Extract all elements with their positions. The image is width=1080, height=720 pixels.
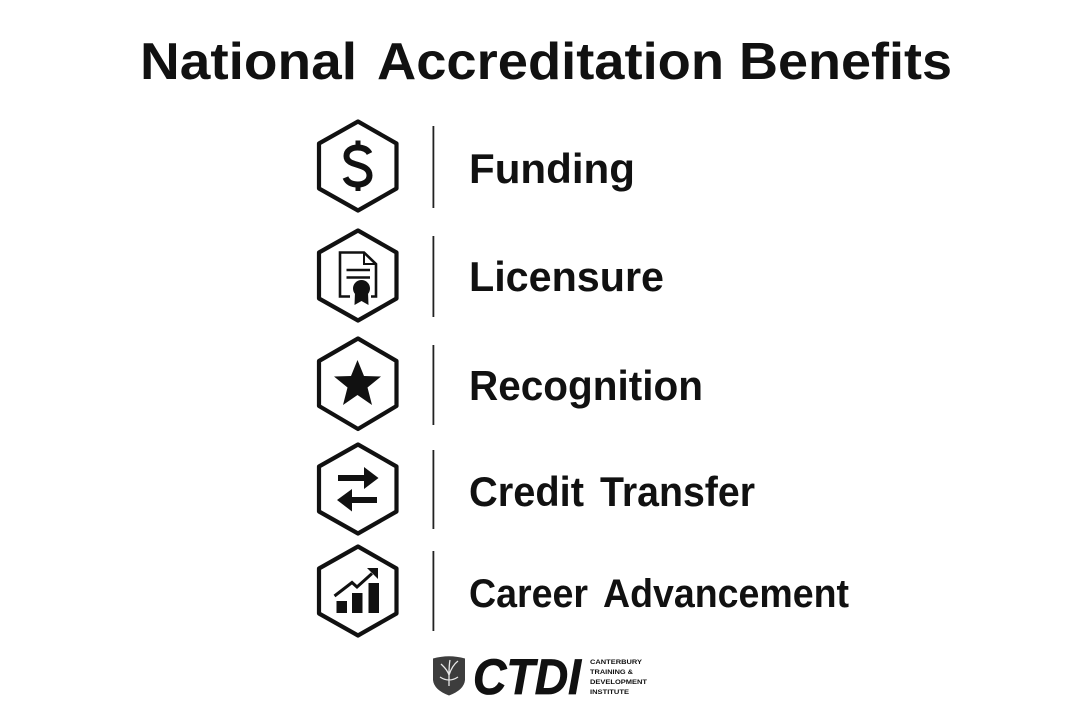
label (469, 572, 849, 616)
label: Career (469, 572, 588, 616)
icon: transfer arrows in hexagon (319, 444, 396, 534)
title: Benefits (739, 33, 952, 91)
label: Credit (469, 468, 584, 515)
title (140, 33, 952, 91)
row: career advancement (319, 546, 849, 636)
divider (432, 236, 434, 317)
row: recognition (319, 338, 703, 429)
divider (432, 551, 434, 631)
logo subtitle: CANTERBURY (590, 659, 643, 666)
divider (432, 345, 434, 425)
icon: certificate document in hexagon (319, 230, 396, 320)
icon: dollar sign in hexagon (319, 122, 396, 210)
label: Recognition (469, 362, 703, 409)
logo wordmark: CTDI (473, 649, 582, 705)
title: Accreditation (377, 33, 724, 91)
divider (432, 450, 434, 529)
label (469, 468, 755, 515)
icon: rising bar chart in hexagon (319, 546, 396, 636)
logo: CTDI (433, 649, 648, 705)
icon: shield (433, 656, 465, 696)
label: Transfer (600, 468, 755, 515)
logo subtitle: INSTITUTE (590, 689, 630, 696)
label: Licensure (469, 253, 664, 300)
icon: star in hexagon (319, 338, 396, 429)
title: National (140, 33, 357, 91)
row: licensure (319, 230, 664, 320)
logo subtitle: TRAINING & (590, 669, 633, 676)
label: Funding (469, 145, 635, 192)
logo subtitle: DEVELOPMENT (590, 679, 648, 686)
row: funding (319, 122, 635, 210)
label: Advancement (603, 572, 849, 616)
divider (432, 126, 434, 208)
row: credit transfer (319, 444, 755, 534)
logo subtitle (590, 659, 648, 696)
